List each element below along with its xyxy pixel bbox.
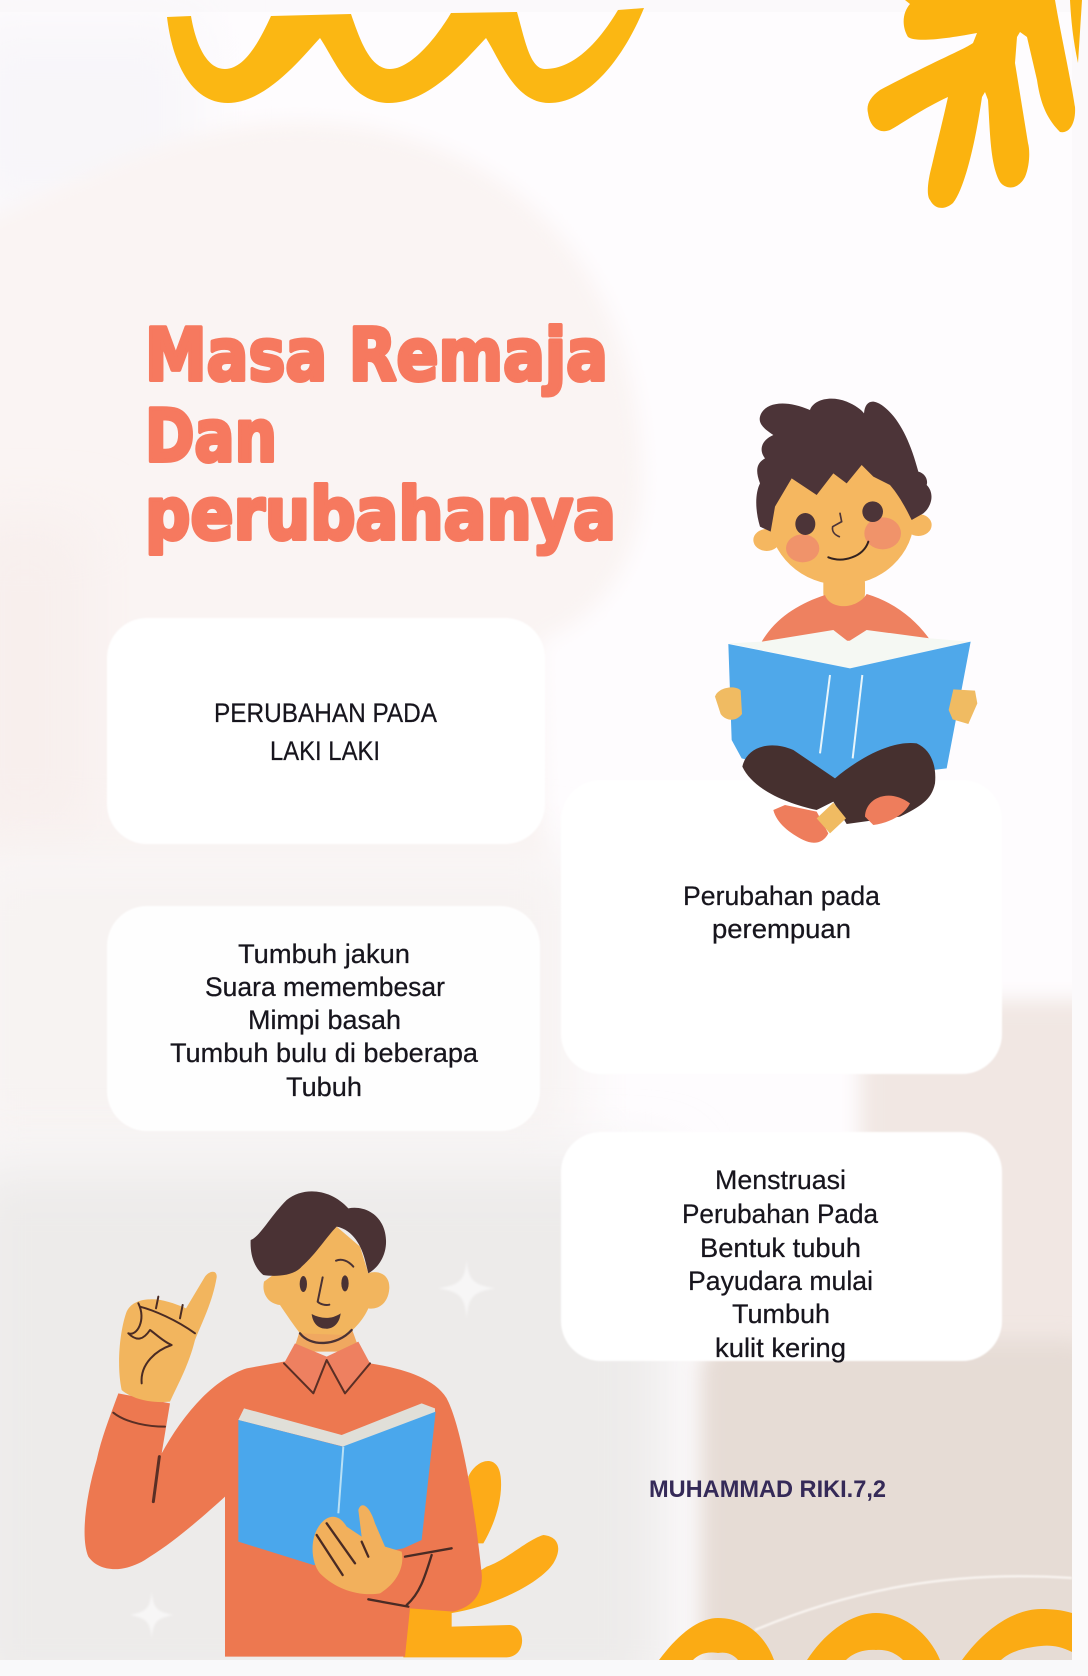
text block: ciri perempuan: Menstruasi [715, 1165, 846, 1195]
title: Masa Remaja [145, 313, 608, 397]
heading: perubahan pada laki laki: LAKI LAKI [270, 736, 380, 766]
paper background with soft blobs [0, 494, 1072, 1660]
boy hair [756, 399, 931, 532]
facial features [300, 1260, 353, 1343]
decoration: top-right yellow sun rays [868, 0, 1082, 208]
illustration: teenager with book [85, 1191, 558, 1657]
heading: perubahan pada perempuan: perempuan [712, 914, 851, 944]
raised hand finger lines [128, 1297, 195, 1383]
boy left foot [773, 805, 828, 843]
boy legs [742, 743, 935, 824]
panel: ciri laki laki [107, 906, 540, 1131]
text block: ciri perempuan: Payudara mulai [688, 1266, 873, 1296]
panel: ciri perempuan [561, 1132, 1002, 1361]
raised hand [119, 1272, 217, 1402]
decoration: top yellow squiggle [167, 8, 644, 103]
text block: ciri laki laki: Tumbuh bulu di beberapa [170, 1038, 479, 1068]
boy shirt [762, 594, 930, 642]
heading: perubahan pada perempuan: Perubahan pada [683, 881, 881, 911]
author name: MUHAMMAD RIKI.7,2 [649, 1476, 886, 1503]
text block: ciri laki laki: Mimpi basah [248, 1005, 401, 1035]
sparkle large [438, 1260, 495, 1318]
title: Dan [145, 394, 277, 478]
boy book cover [728, 642, 971, 782]
collar [284, 1342, 370, 1393]
heading: perubahan pada laki laki [214, 698, 437, 766]
text block: ciri perempuan: Perubahan Pada [682, 1199, 879, 1229]
boy hands [715, 687, 977, 724]
decoration: bottom-right yellow arcs [659, 1609, 1072, 1660]
panel: perubahan pada laki laki [107, 618, 545, 844]
shirt body and raised arm [85, 1362, 482, 1657]
text block: ciri perempuan: kulit kering [715, 1333, 846, 1363]
book pages [238, 1403, 435, 1447]
text block: ciri perempuan: Tumbuh [732, 1299, 830, 1329]
sparkle small [130, 1592, 173, 1638]
boy ears and neck [753, 514, 932, 607]
plant behind teenager [403, 1461, 558, 1657]
lower hand [313, 1505, 402, 1594]
book spine line [338, 1447, 343, 1513]
boy ankle [817, 803, 846, 833]
collar and sleeve lines [113, 1360, 370, 1502]
text block: ciri laki laki: Suara memembesar [205, 972, 445, 1002]
text block: ciri laki laki: Tumbuh jakun [238, 939, 410, 969]
text block: ciri laki laki: Tubuh [286, 1072, 362, 1102]
lower hand and cuff lines [317, 1523, 452, 1607]
boy face [769, 448, 914, 585]
boy eyes nose smile [795, 501, 883, 560]
boy book pages [728, 630, 970, 668]
title [145, 313, 616, 556]
boy cheeks [786, 517, 901, 562]
face [263, 1227, 389, 1335]
illustration: boy reading book [715, 399, 977, 843]
neck [293, 1328, 360, 1352]
text block: ciri laki laki [170, 939, 479, 1102]
heading: perubahan pada perempuan [683, 881, 881, 944]
hair [251, 1191, 386, 1276]
text block: ciri perempuan [682, 1165, 879, 1363]
boy book spine lines [820, 675, 862, 758]
book cover [238, 1412, 436, 1565]
title: perubahanya [145, 472, 616, 556]
boy right foot [865, 796, 910, 825]
text block: ciri perempuan: Bentuk tubuh [700, 1233, 861, 1263]
decoration: thin white curve [755, 1576, 1072, 1630]
heading: perubahan pada laki laki: PERUBAHAN PADA [214, 698, 437, 728]
panel: perubahan pada perempuan [561, 780, 1002, 1074]
